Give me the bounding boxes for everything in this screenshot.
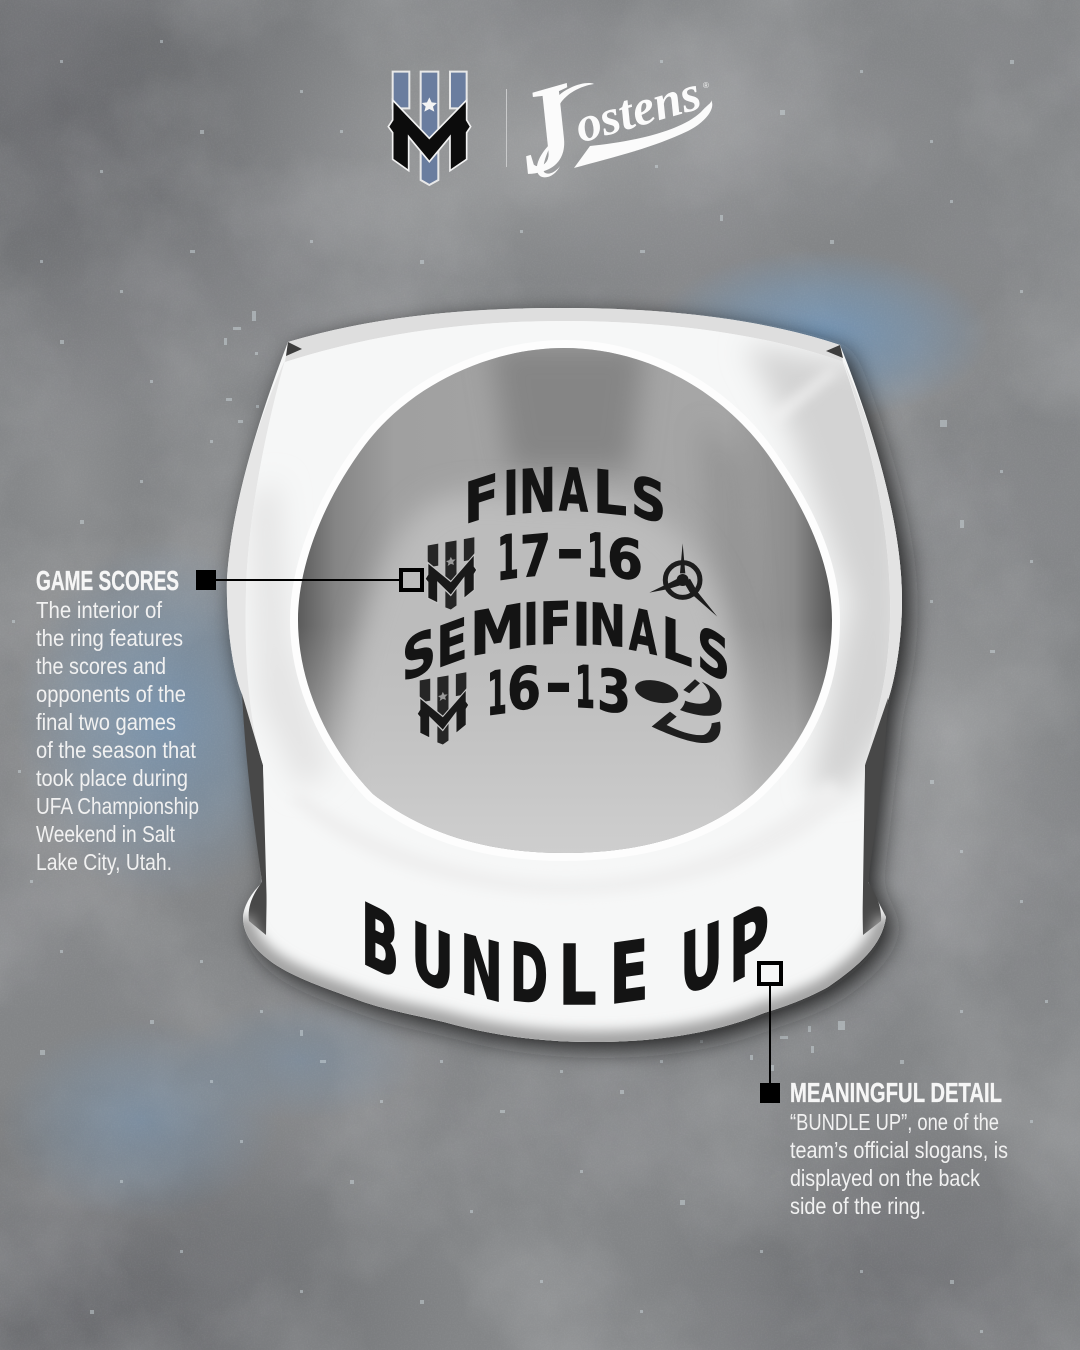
- engraving: FINALS: L: [593, 457, 627, 529]
- engraving: SEMIFINALS: L: [662, 603, 692, 681]
- engraving: FINALS: S: [631, 463, 666, 538]
- callout text: meaningful detail: [790, 1077, 1008, 1219]
- body text: game scores: the ring features: [36, 625, 183, 651]
- engraving: BUNDLE UP slogan: N: [460, 917, 503, 1022]
- engraving: semifinals score 16-13: 3: [597, 656, 631, 728]
- engraving: semifinals score 16-13: -: [545, 650, 572, 718]
- dark side panel left: [242, 694, 267, 935]
- callout connector: game scores: [196, 570, 422, 590]
- icon: engraved disc opponent logo: [633, 676, 722, 743]
- engraving: finals score 17-16: 1: [497, 522, 519, 595]
- engraving: SEMIFINALS: S: [402, 615, 436, 697]
- engraving: finals score 17-16: [497, 516, 643, 595]
- engraving: SEMIFINALS: I: [523, 590, 539, 659]
- engraving: semifinals score 16-13: 1: [487, 658, 507, 730]
- engraving: SEMIFINALS: N: [589, 592, 626, 661]
- engraving: FINALS: A: [559, 455, 588, 526]
- ring inner rim: [294, 344, 836, 857]
- engraving: SEMIFINALS: A: [629, 596, 657, 669]
- engraving: BUNDLE UP slogan: U: [411, 905, 454, 1013]
- body text: meaningful detail: team’s official slogans, is: [790, 1137, 1008, 1163]
- body text: game scores: [36, 597, 199, 875]
- engraving: BUNDLE UP slogan: P: [729, 883, 769, 1005]
- callout text: game scores: [36, 565, 199, 875]
- logo: Jostens wordmark: J: [499, 56, 596, 200]
- engraving: SEMIFINALS: I: [572, 590, 591, 659]
- engraving: FINALS: N: [519, 456, 556, 528]
- dark side panel right: [862, 698, 888, 935]
- engraving: BUNDLE UP slogan: D: [510, 925, 548, 1023]
- logo: team M crest: [388, 72, 471, 185]
- engraving: SEMIFINALS: [402, 589, 730, 699]
- body text: game scores: The interior of: [36, 597, 162, 623]
- engraving: SEMIFINALS: S: [697, 612, 730, 699]
- engraving: finals score 17-16: 7: [520, 523, 551, 591]
- engraving: SEMIFINALS: F: [539, 589, 571, 658]
- engraving: BUNDLE UP slogan: E: [610, 924, 648, 1024]
- body text: game scores: opponents of the: [36, 681, 186, 707]
- body text: meaningful detail: [790, 1109, 1008, 1219]
- engraving: finals score 17-16: 6: [607, 526, 643, 595]
- engraving: finals score 17-16: -: [556, 516, 584, 586]
- body text: game scores: UFA Championship: [36, 793, 199, 819]
- ring face: [246, 321, 890, 950]
- engraving: finals score 17-16: 1: [587, 521, 607, 592]
- body text: game scores: Lake City, Utah.: [36, 849, 172, 875]
- heading: meaningful detail: MEANINGFUL DETAIL: [790, 1077, 1002, 1108]
- logo: Jostens wordmark: ®: [703, 81, 709, 90]
- icon: engraved M crest, semifinals: [417, 672, 469, 749]
- corner notch left: [286, 342, 302, 356]
- callout connector: meaningful detail: [759, 963, 781, 1103]
- engraving: SEMIFINALS: M: [470, 592, 525, 671]
- engraving: semifinals score 16-13: 6: [507, 653, 541, 724]
- ring interior: [290, 340, 840, 860]
- face shading: [250, 345, 905, 895]
- body text: game scores: took place during: [36, 765, 188, 791]
- icon: engraved M crest, finals: [425, 537, 477, 614]
- divider between logos: [506, 89, 507, 167]
- body text: meaningful detail: side of the ring.: [790, 1193, 926, 1219]
- top band: [285, 308, 843, 362]
- ring: [227, 308, 905, 1042]
- logo: Jostens wordmark: [499, 22, 715, 200]
- heading: game scores: GAME SCORES: [36, 565, 179, 596]
- engraving: FINALS: I: [503, 458, 519, 530]
- engraving: BUNDLE UP slogan: [361, 883, 769, 1024]
- lower edge shading: [243, 917, 886, 1042]
- engraving: SEMIFINALS: E: [436, 605, 467, 682]
- engraving: FINALS: F: [464, 461, 499, 538]
- engraving: BUNDLE UP slogan: B: [361, 885, 399, 1001]
- engraving: semifinals score 16-13: 1: [575, 653, 595, 722]
- engraving: BUNDLE UP slogan: U: [680, 903, 723, 1016]
- body text: game scores: final two games: [36, 709, 176, 735]
- side wing right: [843, 360, 902, 765]
- body text: game scores: of the season that: [36, 737, 196, 763]
- engraving: FINALS: [464, 455, 666, 538]
- icon: engraved propeller opponent logo: [649, 543, 717, 617]
- body text: meaningful detail: displayed on the back: [790, 1165, 980, 1191]
- body text: meaningful detail: “BUNDLE UP”, one of the: [790, 1109, 999, 1135]
- engraving: semifinals score 16-13: [487, 650, 631, 730]
- ring silhouette: [227, 308, 902, 1042]
- side wing left: [227, 360, 285, 765]
- corner notch right: [826, 345, 843, 358]
- body text: game scores: Weekend in Salt: [36, 821, 175, 847]
- engraving: BUNDLE UP slogan: L: [558, 929, 596, 1024]
- body text: game scores: the scores and: [36, 653, 166, 679]
- logo: Jostens wordmark: ostens: [568, 64, 707, 153]
